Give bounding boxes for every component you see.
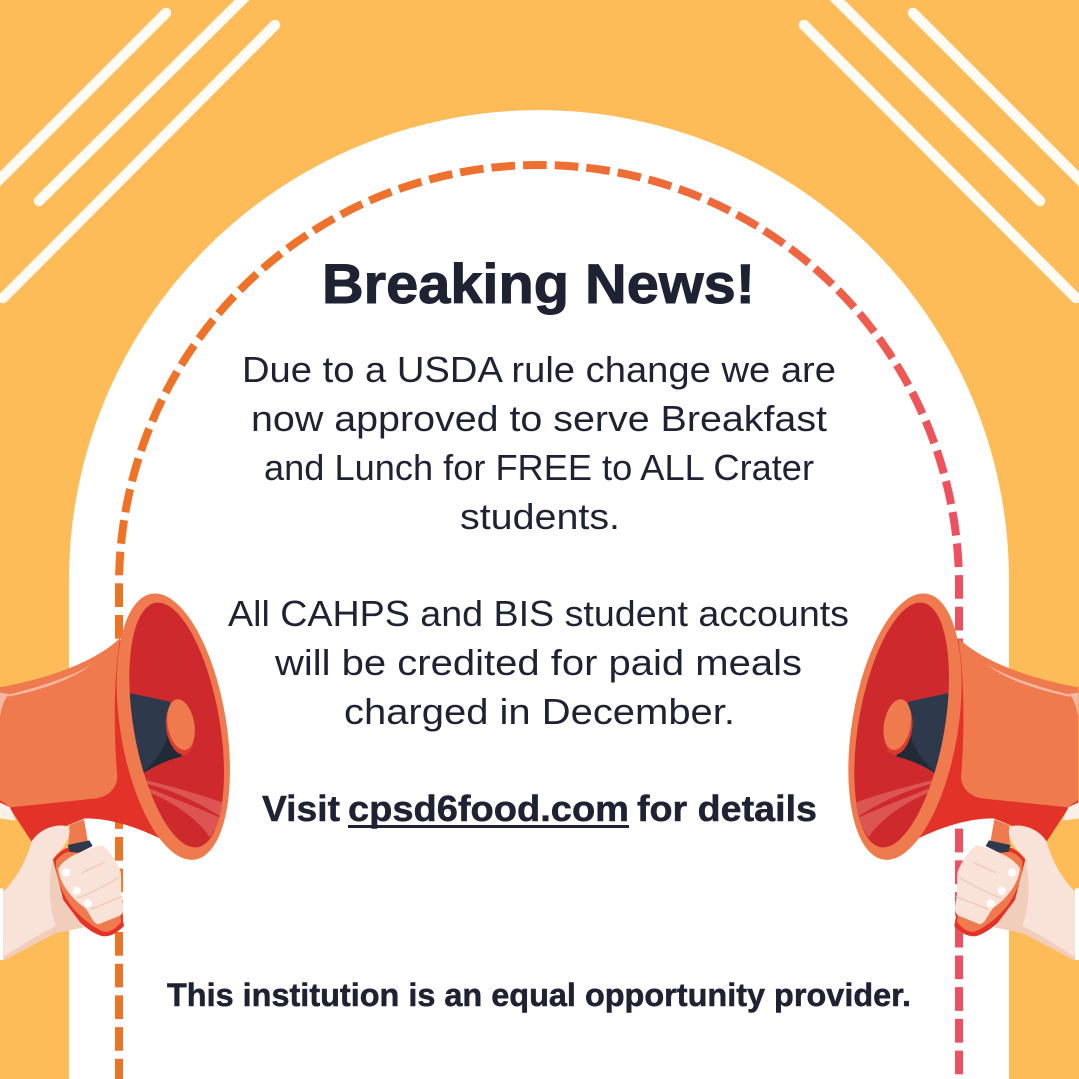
credit paragraph: will be credited for paid meals [274, 642, 802, 683]
website call to action: for details [637, 788, 817, 829]
credit paragraph: All CAHPS and BIS student accounts [228, 593, 849, 634]
credit paragraph [228, 593, 849, 732]
dashed arch outline [119, 165, 959, 1079]
announcement paragraph: Due to a USDA rule change we are [242, 349, 836, 390]
decorative white lines top right [804, 0, 1079, 298]
credit paragraph: charged in December. [344, 691, 735, 732]
website call to action [262, 788, 817, 829]
announcement paragraph: and Lunch for FREE to ALL Crater [264, 447, 814, 488]
icon: left megaphone with hand [0, 585, 247, 961]
decorative white lines top left [0, 0, 275, 298]
equal opportunity statement: This institution is an equal opportunity provider. [167, 977, 911, 1013]
announcement paragraph: now approved to serve Breakfast [251, 398, 827, 439]
website call to action: Visit [262, 788, 340, 829]
icon: right megaphone with hand [831, 585, 1079, 961]
website call to action: cpsd6food.com [348, 788, 629, 829]
white arch panel [69, 110, 1009, 1079]
announcement paragraph: students. [460, 496, 620, 537]
announcement paragraph [242, 349, 836, 537]
title: Breaking News! [322, 252, 755, 315]
